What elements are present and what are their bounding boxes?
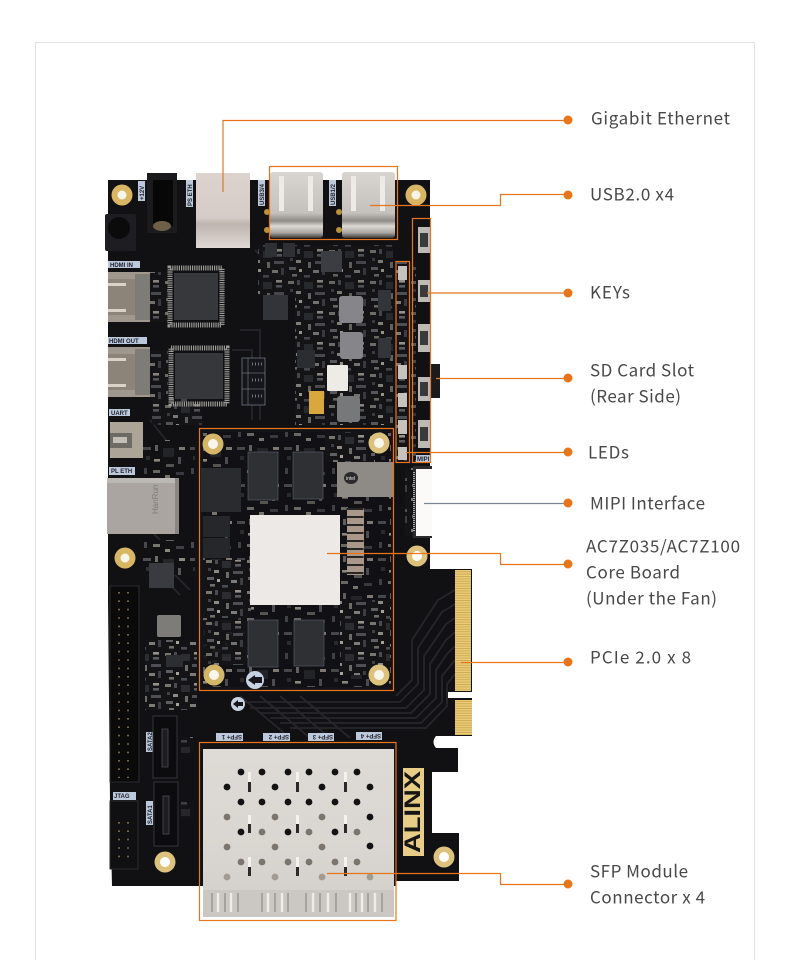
callout: highlight boxes — [200, 166, 430, 920]
callout: KEYs — [427, 279, 630, 304]
callout: SFP module — [327, 858, 705, 909]
connector: PL ethernet: HanRun — [151, 485, 160, 514]
FPGA heat spreader — [250, 515, 340, 605]
label: silkscreen connector names: HDMI IN — [110, 263, 133, 269]
callout: core board — [327, 533, 740, 610]
connector: MIPI — [405, 466, 432, 538]
connector: USB right — [336, 172, 395, 238]
label: silkscreen connector names: MIPI — [417, 457, 430, 463]
power jack — [147, 173, 177, 233]
callout: core board: AC7Z035/AC7Z100 — [586, 533, 740, 558]
callout: USB2.0 x4 — [370, 181, 674, 206]
callout: SD Card Slot: SD Card Slot — [590, 357, 695, 382]
label: silkscreen connector names: JTAG — [114, 794, 130, 800]
callout: SFP module: Connector x 4 — [590, 884, 705, 909]
vents — [224, 769, 373, 849]
label row: SFP+ port names: SFP+ 4 — [360, 732, 381, 738]
callout: core board: (Under the Fan) — [586, 585, 717, 610]
bottom arrow — [246, 671, 264, 689]
connector: UART mini USB — [110, 422, 143, 458]
buttons: KEYs — [418, 227, 430, 448]
connector: SATA 2 — [153, 716, 193, 778]
traces: PCIe routing — [140, 250, 455, 738]
callout: MIPI Interface: MIPI Interface — [590, 490, 705, 515]
connector: HDMI IN — [108, 272, 150, 322]
callout: core board: Core Board — [586, 559, 680, 584]
callout: LEDs — [406, 439, 629, 464]
white crystal and tantalum — [327, 365, 348, 391]
callout: USB2.0 x4: USB2.0 x4 — [590, 181, 674, 206]
board assembly — [105, 172, 472, 917]
connector: 40 pin header — [110, 586, 139, 782]
label row: SFP+ port names: SFP+ 3 — [312, 733, 333, 739]
chip: HDMI transmitter — [171, 348, 227, 404]
callout: MIPI Interface — [424, 490, 705, 515]
callout: KEYs: KEYs — [590, 279, 630, 304]
callout: LEDs: LEDs — [588, 439, 629, 464]
holes — [202, 434, 224, 454]
resistor column — [347, 508, 364, 575]
slots — [248, 782, 347, 876]
callout: PCIe — [461, 644, 691, 669]
label: silkscreen connector names: PS ETH — [188, 184, 194, 206]
label row: SFP+ port names — [216, 732, 382, 741]
label row: SFP+ port names: SFP+ 1 — [221, 733, 242, 739]
ALINX logo: ALINX — [400, 771, 425, 853]
core board clutter — [203, 560, 251, 618]
panel: SFP cage — [201, 743, 395, 917]
mounting holes — [112, 184, 454, 872]
label: silkscreen connector names: PL ETH — [111, 469, 132, 475]
label: silkscreen connector names: USB3/4 — [260, 183, 266, 205]
silkscreen arrow — [231, 697, 245, 711]
callout: Gigabit Ethernet — [223, 105, 731, 192]
label: silkscreen connector names: HDMI OUT — [109, 339, 139, 345]
component clutter areas — [258, 245, 393, 295]
PCIe gold fingers — [455, 570, 472, 735]
connector: PL ethernet — [107, 478, 179, 534]
callout: Gigabit Ethernet: Gigabit Ethernet — [591, 105, 731, 130]
connector: SATA 1 — [154, 782, 194, 846]
label: silkscreen connector names — [108, 180, 430, 825]
connector: PS ethernet — [196, 173, 250, 248]
SD card slot — [431, 364, 440, 398]
label row: SFP+ port names: SFP+ 2 — [268, 733, 289, 739]
fins — [203, 890, 394, 917]
LED indicators — [398, 266, 407, 460]
callout: SD Card Slot — [436, 357, 695, 408]
callout: SFP module: SFP Module — [590, 858, 688, 883]
label: silkscreen connector names: USB1/2 — [331, 183, 337, 205]
label: silkscreen connector names: SATA2 — [148, 732, 154, 751]
board outline — [108, 180, 472, 886]
network module — [337, 462, 393, 497]
connector: JTAG header — [110, 801, 138, 869]
connector: HDMI OUT — [108, 347, 150, 397]
chip and inductor near header — [149, 563, 183, 667]
power switch — [105, 214, 136, 251]
memory chips — [248, 452, 278, 500]
callout: PCIe: PCIe 2.0 x 8 — [590, 644, 691, 669]
label: silkscreen connector names: SATA1 — [148, 805, 154, 824]
label: silkscreen connector names: +12V — [140, 186, 146, 200]
dip switch table — [242, 358, 265, 405]
label: silkscreen connector names: UART — [111, 411, 128, 417]
qfn chips and inductors — [263, 243, 391, 422]
panel: core board: intel — [346, 476, 355, 482]
panel: core board — [199, 428, 394, 690]
connector: USB left — [264, 172, 323, 238]
chip: HDMI receiver — [170, 268, 222, 325]
callout: SD Card Slot: (Rear Side) — [590, 383, 681, 408]
